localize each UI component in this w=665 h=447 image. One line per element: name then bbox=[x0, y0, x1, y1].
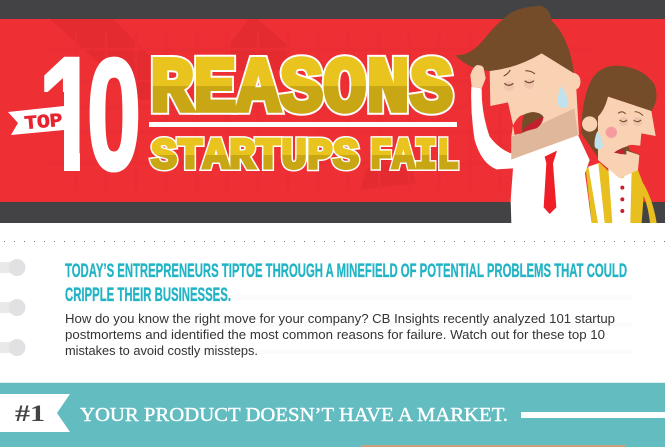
ribbon: top bbox=[8, 106, 64, 135]
illustration: crying woman bbox=[581, 66, 657, 223]
man hair bbox=[455, 6, 574, 73]
title number 10 bbox=[44, 56, 138, 172]
number ribbon bbox=[0, 394, 70, 432]
intro body text: postmortems and identified the most common reasons for failure. Watch out for these top 10 bbox=[65, 327, 605, 342]
intro body text: How do you know the right move for your company? CB Insights recently analyzed 101 startup bbox=[65, 311, 615, 326]
man hand bbox=[470, 65, 486, 88]
faint text stripes bbox=[65, 295, 632, 354]
decorative pegs bbox=[0, 259, 26, 356]
title: startups fail: STARTUPS bbox=[151, 132, 359, 182]
title divider bbox=[149, 122, 457, 127]
man mouth bbox=[513, 112, 544, 134]
man eyes bbox=[504, 70, 535, 91]
title: startups fail bbox=[148, 136, 460, 172]
man tie bbox=[544, 151, 557, 214]
man shirt bbox=[471, 87, 592, 223]
title: startups fail: FAIL bbox=[370, 132, 459, 182]
title number 10: 1 bbox=[37, 22, 100, 206]
man beard bbox=[511, 108, 578, 159]
section heading: YOUR PRODUCT DOESN’T HAVE A MARKET. bbox=[80, 404, 508, 426]
man tear bbox=[558, 86, 568, 108]
section band bbox=[0, 382, 665, 447]
ribbon: top: TOP bbox=[24, 110, 63, 135]
dotted divider bbox=[4, 240, 665, 242]
intro heading: CRIPPLE THEIR BUSINESSES. bbox=[65, 285, 231, 306]
illustration: crying man bbox=[455, 6, 592, 223]
title: reasons: REASONS bbox=[150, 46, 453, 134]
man face bbox=[490, 52, 580, 159]
title: startups fail: STARTUPS bbox=[151, 132, 359, 182]
title: startups fail: FAIL bbox=[370, 132, 459, 182]
title: startups fail: FAIL bbox=[370, 132, 459, 182]
intro body text bbox=[65, 311, 615, 358]
title number 10: 0 bbox=[87, 27, 141, 203]
title: reasons bbox=[150, 54, 455, 116]
number ribbon: #1 bbox=[15, 401, 45, 426]
intro heading bbox=[65, 261, 627, 306]
heading rule bbox=[521, 412, 665, 418]
title: startups fail: STARTUPS bbox=[151, 132, 359, 182]
header banner bbox=[0, 0, 665, 223]
title: reasons: REASONS bbox=[150, 46, 453, 134]
title: reasons: REASONS bbox=[150, 46, 453, 134]
intro body text: mistakes to avoid costly missteps. bbox=[65, 343, 258, 358]
